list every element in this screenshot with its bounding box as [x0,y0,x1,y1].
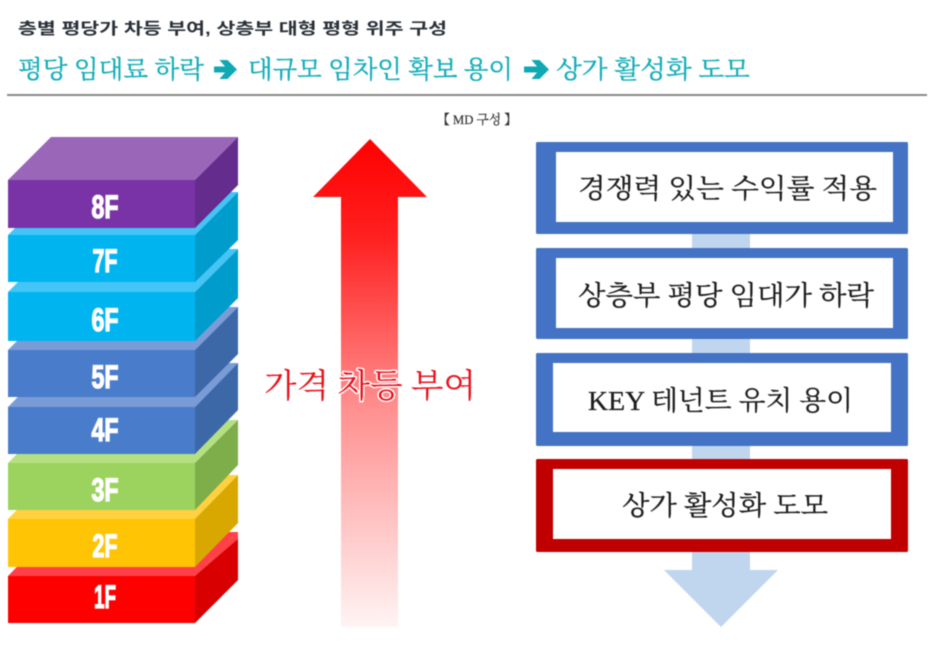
box: key tenant [536,353,908,446]
box: competitive yield: 경쟁력 있는 수익률 적용 [578,174,877,204]
label: price differential: 가격 차등 부여 [264,368,476,405]
arrow: flow 1 [214,60,237,79]
floor 7F: 7F [92,243,118,279]
box: upper floor rent: 상층부 평당 임대가 하락 [578,281,874,311]
box: key tenant: KEY 테넌트 유치 용이 [588,386,853,416]
floor 6F: 6F [92,302,118,338]
MD label: 【 MD 구성 】 [437,112,517,127]
floor 7F [8,192,238,282]
subheading: rent flow: 상가 활성화 도모 [556,56,750,84]
floor 3F [8,420,238,510]
floor 3F: 3F [92,472,118,508]
box: upper floor rent [536,248,908,339]
floor 4F: 4F [92,412,118,448]
box: competitive yield [536,142,908,234]
floor 4F [8,363,238,454]
subheading: rent flow [18,56,750,84]
floor 5F [8,307,238,397]
subheading: rent flow: 평당 임대료 하락 [18,56,205,84]
box: activation: 상가 활성화 도모 [622,491,828,521]
floor 5F: 5F [92,359,118,395]
floor 1F: 1F [94,579,116,615]
floor 8F: 8F [92,189,118,225]
floor 2F: 2F [92,528,118,564]
floor 1F [8,532,238,623]
subheading: rent flow: 대규모 임차인 확보 용이 [248,56,513,84]
floor 6F [8,249,238,341]
box: activation [536,459,908,552]
floor 8F [8,137,238,228]
connector arrow [664,234,778,627]
heading: 층별 평당가 차등 부여, 상층부 대형 평형 위주 구성 [18,20,447,38]
arrow: price up [313,139,427,627]
floor 2F [8,475,238,567]
arrow: flow 2 [524,60,549,79]
building stack [8,137,238,623]
